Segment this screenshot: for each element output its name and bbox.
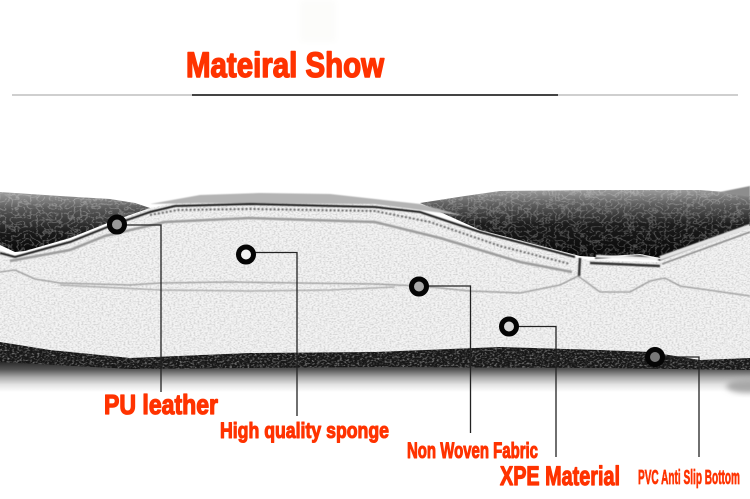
leather left	[0, 192, 150, 252]
PU leather centre band	[0, 204, 750, 272]
callout: PU leather: PU leather	[104, 389, 218, 420]
bottom shadow	[0, 362, 750, 392]
centre grey top strip	[150, 193, 465, 216]
right top grey corner	[720, 186, 750, 197]
foam layers	[0, 202, 750, 360]
leather right	[420, 188, 750, 260]
callout: non woven fabric	[407, 279, 538, 463]
callout: non woven fabric: Non Woven Fabric	[407, 438, 538, 463]
callout: high quality sponge	[220, 247, 389, 443]
non woven fabric seam	[0, 258, 750, 296]
callout: PVC anti slip bottom	[638, 350, 740, 489]
callout: PU leather	[104, 217, 218, 420]
callout: high quality sponge: High quality sponge	[220, 418, 389, 443]
title rule	[12, 94, 738, 96]
title: Mateiral Show	[186, 46, 385, 85]
background smudge	[300, 0, 336, 42]
callout: XPE material: XPE Material	[500, 461, 620, 491]
PVC anti slip bottom band	[0, 342, 750, 370]
callout: XPE material	[500, 319, 620, 491]
material cross-section photo	[0, 186, 750, 393]
shadow dark right corner	[726, 379, 750, 393]
